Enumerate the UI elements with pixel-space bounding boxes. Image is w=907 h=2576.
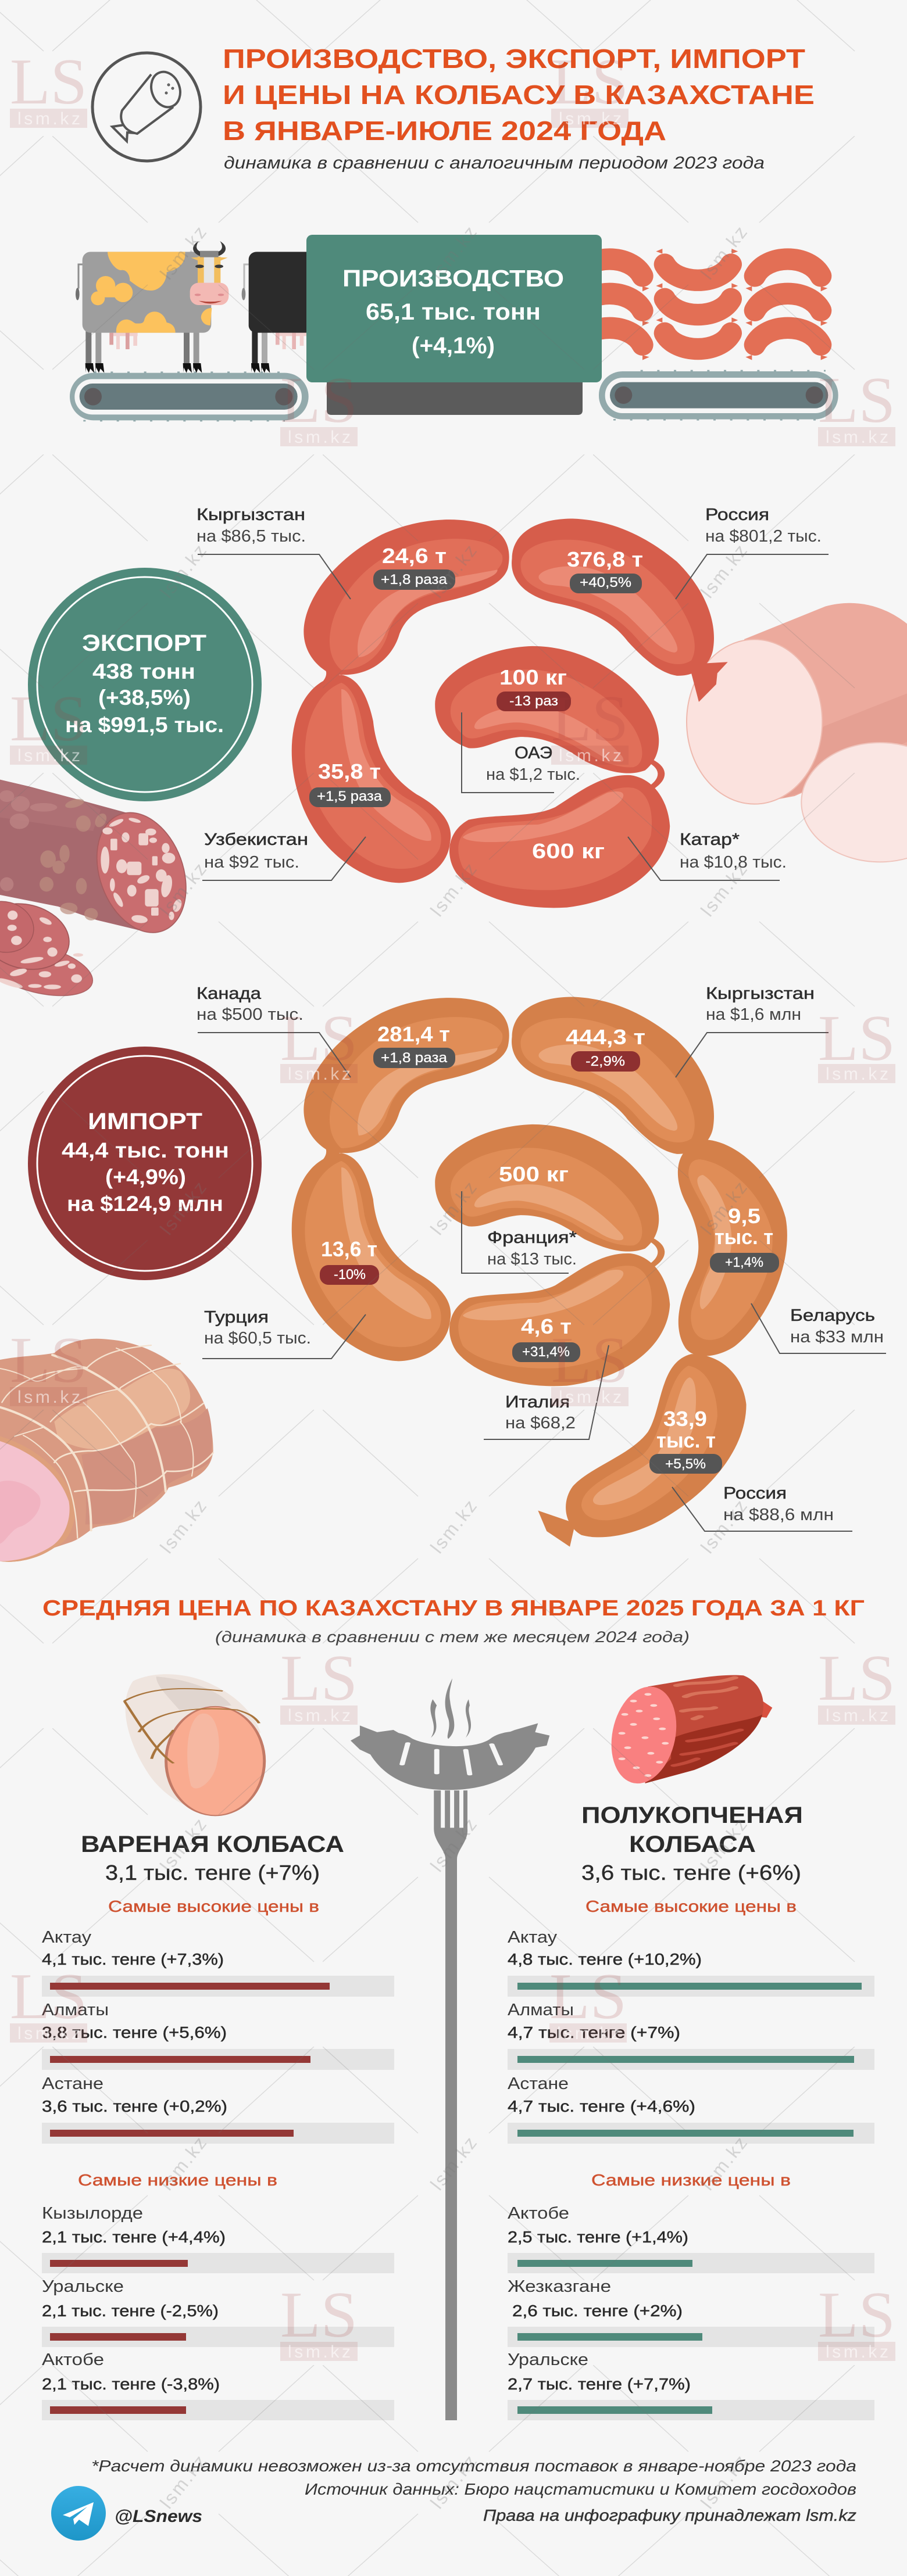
import: Italy: на $68,2 — [505, 1414, 576, 1432]
bar: Zhezkazgan — [508, 2277, 874, 2347]
watermarks: LS logos: LS — [818, 2279, 895, 2351]
watermarks: LS logos: lsm.kz — [826, 2342, 888, 2362]
watermarks: LS logos: LS — [551, 1324, 629, 1396]
bar: Zhezkazgan: Жезказгане — [508, 2277, 611, 2296]
bar: Kyzylorda: 2,1 тыс. тенге (+4,4%) — [42, 2228, 226, 2246]
panel: semi-smoked sausage, lowest prices — [508, 2171, 874, 2420]
import: Russia: на $88,6 млн — [723, 1506, 834, 1524]
watermarks: LS logos: lsm.kz — [557, 2024, 620, 2043]
watermarks: LS logos: LS — [280, 2279, 358, 2351]
panel: semi-smoked sausage, highest prices — [508, 1897, 874, 2144]
export: Uzbekistan: на $92 тыс. — [204, 853, 299, 872]
watermarks: LS logos: lsm.kz — [288, 1065, 351, 1084]
bar: Uralsk: 2,1 тыс. тенге (-2,5%) — [42, 2302, 219, 2320]
bar: Kyzylorda — [42, 2204, 394, 2273]
watermarks: LS logos: LS — [280, 1002, 358, 1074]
export: UAE: ОАЭ — [515, 744, 552, 762]
bar: Aktau: 4,1 тыс. тенге (+7,3%) — [42, 1950, 224, 1968]
import: Belarus: +1,4% — [725, 1255, 763, 1270]
watermarks: LS logos: LS — [10, 1961, 87, 2033]
illustration: salami left of export — [0, 780, 202, 1005]
bar: Aktobe: 2,1 тыс. тенге (-3,8%) — [42, 2375, 220, 2393]
export: Kyrgyzstan: на $86,5 тыс. — [197, 527, 306, 546]
panel: export circle: на $991,5 тыс. — [65, 713, 224, 737]
bar: Aktobe: 2,5 тыс. тенге (+1,4%) — [508, 2228, 688, 2246]
boiled sausage heading: 3,1 тыс. тенге (+7%) — [105, 1861, 320, 1884]
export: Uzbekistan: +1,5 раза — [317, 789, 383, 804]
watermarks: LS logos: LS — [10, 1324, 87, 1396]
watermarks: LS logos: lsm.kz — [17, 109, 80, 128]
export: Russia: Россия — [705, 506, 769, 524]
import: Russia: тыс. т — [656, 1428, 716, 1452]
bar: Kyzylorda: Кызылорде — [42, 2204, 143, 2223]
import: Kyrgyzstan: Кыргызстан — [706, 984, 815, 1003]
bar: Astana — [508, 2075, 874, 2144]
watermarks: LS logos: LS — [818, 1002, 895, 1074]
import: Canada: на $500 тыс. — [197, 1005, 303, 1024]
import: Turkey: 13,6 т — [321, 1237, 377, 1261]
panel: production: ПРОИЗВОДСТВО — [342, 265, 564, 292]
import: Canada — [197, 984, 455, 1077]
watermarks: LS logos: lsm.kz — [17, 746, 80, 765]
illustration: ham left of import — [0, 1339, 213, 1562]
watermarks: LS logos: lsm.kz — [17, 2024, 80, 2043]
bar: Astana: Астане — [42, 2075, 103, 2093]
panel: import circle: 44,4 тыс. тонн — [62, 1138, 229, 1162]
bar: Almaty: 3,8 тыс. тенге (+5,6%) — [42, 2023, 227, 2041]
panel: semi-smoked sausage, lowest prices: Самые низкие цены в — [591, 2171, 791, 2189]
bar: Aktau: 4,8 тыс. тенге (+10,2%) — [508, 1950, 702, 1968]
export: Uzbekistan — [202, 759, 391, 880]
export: Russia — [567, 506, 829, 599]
price section heading: СРЕДНЯЯ ЦЕНА ПО КАЗАХСТАНУ В ЯНВАРЕ 2025 ГОДА ЗА 1 КГ — [42, 1596, 865, 1621]
export: Uzbekistan: 35,8 т — [318, 759, 381, 783]
cow: grey with yellow spots — [76, 252, 212, 373]
panel: export circle: 438 тонн — [92, 660, 195, 683]
import sausage chain — [292, 997, 714, 1386]
export: Kyrgyzstan: Кыргызстан — [197, 506, 305, 524]
illustration: boiled sausage slice right of export — [687, 603, 907, 862]
export: Qatar: на $10,8 тыс. — [680, 853, 787, 872]
export: UAE: 100 кг — [499, 665, 567, 689]
watermarks: LS logos: LS — [10, 46, 87, 118]
semi-smoked sausage heading: ПОЛУКОПЧЕНАЯ — [581, 1803, 803, 1828]
watermarks: LS logos: LS — [551, 683, 629, 755]
bar: Aktau: Актау — [508, 1928, 558, 1947]
footnotes and source: Права на инфографику принадлежат lsm.kz — [483, 2506, 856, 2524]
import: Russia: Россия — [723, 1484, 787, 1503]
boiled sausage heading — [81, 1832, 344, 1884]
import: France — [462, 1162, 577, 1273]
export: Russia: +40,5% — [580, 575, 631, 590]
bar: Uralsk: 2,7 тыс. тенге (+7,7%) — [508, 2375, 691, 2393]
import: Russia: +5,5% — [665, 1456, 706, 1472]
icon: fork with sausage and steam — [351, 1678, 549, 2420]
import: Turkey — [202, 1237, 379, 1359]
illustration: cows on left conveyor — [70, 241, 309, 421]
export: Russia: 376,8 т — [567, 547, 643, 571]
watermarks: LS logos: LS — [280, 1642, 358, 1714]
import: Russia — [649, 1407, 852, 1531]
import: Belarus: на $33 млн — [790, 1328, 884, 1346]
panel: boiled sausage, lowest prices: Самые низкие цены в — [78, 2171, 277, 2189]
watermarks: LS logos: lsm.kz — [559, 109, 622, 128]
icon: telegram — [51, 2486, 106, 2541]
bar: Almaty — [42, 2001, 394, 2070]
watermarks: LS logos: lsm.kz — [288, 2342, 351, 2362]
import: Italy: Италия — [505, 1393, 570, 1411]
watermarks: LS logos: LS — [818, 1642, 895, 1714]
import sausages: Belarus and Russia — [538, 1140, 787, 1547]
conveyor right — [599, 371, 838, 420]
bar: Aktau — [508, 1928, 874, 1997]
subtitle: динамика в сравнении с аналогичным периодом 2023 года — [224, 153, 765, 173]
watermarks: LS logos: LS — [10, 683, 87, 755]
panel: production — [306, 235, 602, 382]
semi-smoked sausage heading: КОЛБАСА — [629, 1832, 756, 1857]
import: Kyrgyzstan: 444,3 т — [566, 1025, 645, 1049]
bar: Zhezkazgan: 2,6 тыс. тенге (+2%) — [512, 2302, 683, 2320]
bar: Aktau — [42, 1928, 394, 1997]
conveyor left — [70, 372, 309, 421]
import: Italy: 4,6 т — [521, 1314, 572, 1338]
cow head — [190, 241, 228, 305]
bar: Aktobe: Актобе — [42, 2351, 104, 2369]
bar: Uralsk: Уральске — [508, 2351, 588, 2369]
cow: black, partly hidden — [242, 252, 307, 373]
import: Russia: 33,9 — [663, 1407, 707, 1431]
watermarks: LS logos: LS — [549, 1961, 627, 2033]
panel: boiled sausage, lowest prices — [42, 2171, 394, 2420]
machine base — [327, 381, 583, 415]
bar: Aktau: Актау — [42, 1928, 92, 1947]
title: И ЦЕНЫ НА КОЛБАСУ В КАЗАХСТАНЕ — [223, 80, 815, 110]
bar: Uralsk: Уральске — [42, 2277, 124, 2296]
export: UAE — [462, 665, 580, 793]
bar: Aktobe — [42, 2351, 394, 2420]
watermarks: LS logos: lsm.kz — [826, 1706, 888, 1725]
import: Canada: Канада — [197, 984, 262, 1003]
import: Canada: +1,8 раза — [381, 1050, 448, 1066]
export: Qatar: Катар* — [680, 830, 740, 849]
watermarks: LS logos: lsm.kz — [826, 428, 888, 447]
panel: import circle: ИМПОРТ — [88, 1109, 202, 1134]
panel: boiled sausage, highest prices — [42, 1897, 394, 2144]
watermarks: LS logos: lsm.kz — [826, 1065, 888, 1084]
export: Qatar — [532, 830, 787, 880]
semi-smoked sausage heading — [581, 1803, 803, 1884]
panel: production: 65,1 тыс. тонн — [366, 299, 541, 325]
illustration: semi-smoked sausage — [605, 1675, 772, 1784]
import: France: на $13 тыс. — [487, 1250, 577, 1269]
bar: Astana: 4,7 тыс. тенге (+4,6%) — [508, 2097, 695, 2115]
import: Italy: +31,4% — [522, 1344, 570, 1360]
export: Qatar: 600 кг — [532, 839, 605, 863]
bar: Aktobe — [508, 2204, 874, 2273]
title: ПРОИЗВОДСТВО, ЭКСПОРТ, ИМПОРТ — [223, 44, 805, 74]
panel: export circle: ЭКСПОРТ — [82, 630, 206, 656]
illustration: sausages on right conveyor — [567, 249, 838, 420]
panel: semi-smoked sausage, highest prices: Самые высокие цены в — [585, 1897, 797, 1915]
watermarks: LS logos: lsm.kz — [559, 1388, 622, 1407]
export: Uzbekistan: Узбекистан — [204, 830, 308, 849]
import: France: 500 кг — [499, 1162, 569, 1186]
import: Turkey: -10% — [334, 1267, 366, 1282]
panel: import circle: на $124,9 млн — [67, 1192, 223, 1216]
watermarks: LS logos: LS — [818, 364, 895, 436]
import: Belarus — [710, 1204, 886, 1353]
watermarks: LS logos: lsm.kz — [17, 1388, 80, 1407]
export: UAE: -13 раз — [509, 693, 558, 709]
bar: Uralsk — [508, 2351, 874, 2420]
bar: Astana: Астане — [508, 2075, 569, 2093]
panel: production: (+4,1%) — [412, 333, 495, 359]
price section subtitle: (динамика в сравнении с тем же месяцем 2024 года) — [215, 1628, 690, 1646]
bar: Uralsk — [42, 2277, 394, 2347]
export: Russia: на $801,2 тыс. — [705, 527, 822, 546]
export: UAE: на $1,2 тыс. — [486, 765, 580, 784]
bar: Almaty: 4,7 тыс. тенге (+7%) — [508, 2023, 680, 2041]
import: Turkey: на $60,5 тыс. — [204, 1329, 311, 1348]
import: Belarus: 9,5 — [728, 1204, 760, 1228]
bar: Almaty: Алматы — [42, 2001, 109, 2019]
import: Turkey: Турция — [204, 1308, 269, 1327]
sausage rows — [567, 249, 827, 360]
watermarks: LS logos: lsm.kz — [288, 1706, 351, 1725]
semi-smoked sausage heading: 3,6 тыс. тенге (+6%) — [581, 1861, 801, 1884]
panel: boiled sausage, highest prices: Самые высокие цены в — [108, 1897, 319, 1915]
footnotes and source: Источник данных: Бюро нацстатистики и Комитет госдоходов — [305, 2480, 856, 2498]
footnotes and source: *Расчет динамики невозможен из-за отсутствия поставок в январе-ноябре 2023 года — [91, 2457, 856, 2475]
import: Kyrgyzstan: на $1,6 млн — [706, 1005, 801, 1024]
bar: Almaty: Алматы — [508, 2001, 574, 2019]
import: Italy — [484, 1314, 609, 1439]
panel: import circle: (+4,9%) — [105, 1165, 186, 1189]
telegram handle: @LSnews — [115, 2507, 202, 2526]
bar: Aktobe: Актобе — [508, 2204, 569, 2223]
import: Belarus: тыс. т — [715, 1225, 773, 1249]
import: France: Франция* — [487, 1228, 577, 1247]
import: Kyrgyzstan — [566, 984, 829, 1077]
icon: sausage in a circle — [92, 53, 201, 161]
export: Kyrgyzstan: +1,8 раза — [381, 572, 448, 587]
illustration: boiled sausage — [124, 1674, 265, 1815]
panel: import circle — [28, 1047, 262, 1280]
import: Canada: 281,4 т — [377, 1022, 450, 1046]
import: Belarus: Беларусь — [790, 1306, 875, 1325]
panel: export circle: (+38,5%) — [98, 686, 191, 710]
bar: Astana — [42, 2075, 394, 2144]
watermarks: LS logos: LS — [551, 46, 629, 118]
boiled sausage heading: ВАРЕНАЯ КОЛБАСА — [81, 1832, 344, 1857]
bar: Astana: 3,6 тыс. тенге (+0,2%) — [42, 2097, 227, 2115]
import: Kyrgyzstan: -2,9% — [585, 1054, 625, 1069]
footnotes and source — [91, 2457, 856, 2524]
panel: export circle — [28, 568, 262, 801]
export: Kyrgyzstan — [197, 506, 455, 599]
export sausage chain — [292, 518, 728, 908]
watermarks: LS logos: LS — [280, 364, 358, 436]
title — [223, 44, 815, 146]
watermarks: LS logos: lsm.kz — [288, 428, 351, 447]
export: Kyrgyzstan: 24,6 т — [382, 544, 447, 568]
bar: Almaty — [508, 2001, 874, 2070]
watermarks: LS logos: lsm.kz — [559, 746, 622, 765]
title: В ЯНВАРЕ-ИЮЛЕ 2024 ГОДА — [223, 116, 666, 146]
